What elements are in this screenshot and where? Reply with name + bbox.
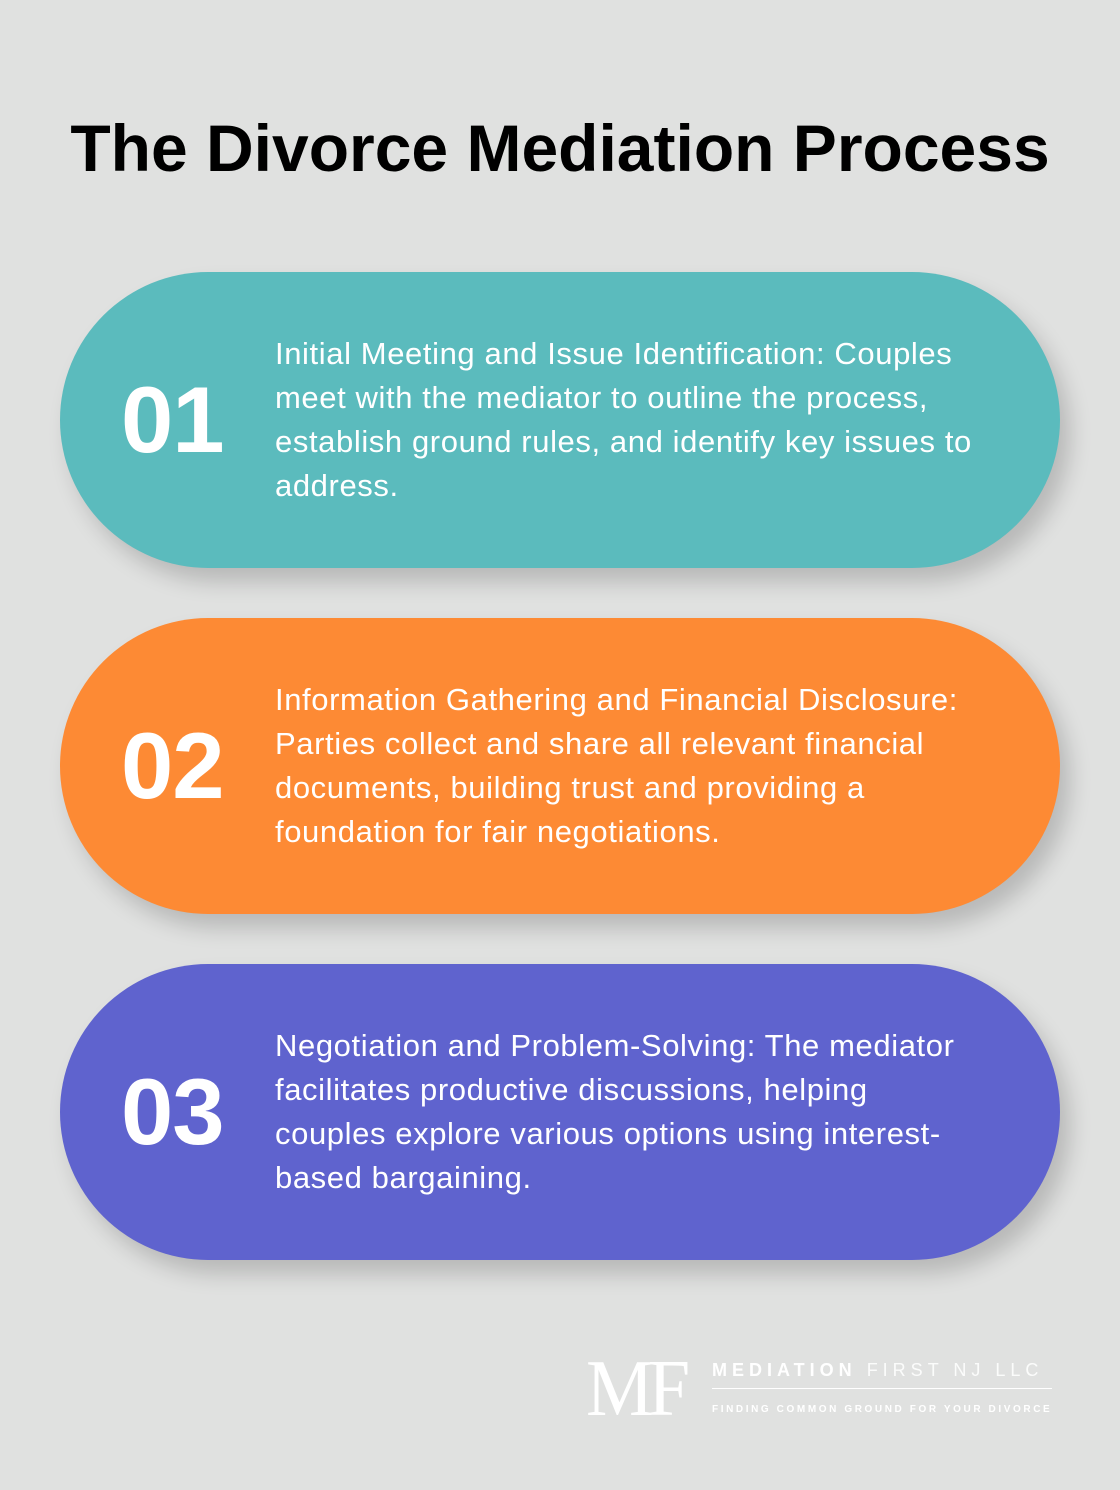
text: step 03: facilitates productive discussions, helping — [275, 1072, 868, 1107]
text: step 03 — [275, 1028, 955, 1195]
logo mark MF: MF — [586, 1345, 684, 1433]
text: step 02: Parties collect and share all relevant financial — [275, 726, 924, 761]
text: step 02 — [275, 682, 958, 849]
text: step 03: couples explore various options using interest- — [275, 1116, 941, 1151]
logo tagline: FINDING COMMON GROUND FOR YOUR DIVORCE — [712, 1404, 1052, 1415]
text: step 03: based bargaining. — [275, 1160, 532, 1195]
panel: step 02 — [60, 618, 1060, 914]
logo — [586, 1345, 1052, 1433]
text: step 01 — [275, 336, 972, 503]
text: step 02: Information Gathering and Financial Disclosure: — [275, 682, 958, 717]
text: step 01: address. — [275, 468, 399, 503]
number 02: 02 — [121, 713, 224, 818]
title: The Divorce Mediation Process — [70, 111, 1050, 185]
number 01: 01 — [121, 367, 224, 472]
panel: step 03 — [60, 964, 1060, 1260]
text: step 02: documents, building trust and providing a — [275, 770, 865, 805]
logo name: MEDIATION FIRST NJ LLC — [712, 1360, 1043, 1380]
number 03: 03 — [121, 1059, 224, 1164]
text: step 01: Initial Meeting and Issue Identification: Couples — [275, 336, 952, 371]
panel: step 01 — [60, 272, 1060, 568]
text: step 02: foundation for fair negotiations. — [275, 814, 720, 849]
text: step 01: meet with the mediator to outline the process, — [275, 380, 928, 415]
text: step 03: Negotiation and Problem-Solving: The mediator — [275, 1028, 955, 1063]
text: step 01: establish ground rules, and identify key issues to — [275, 424, 972, 459]
